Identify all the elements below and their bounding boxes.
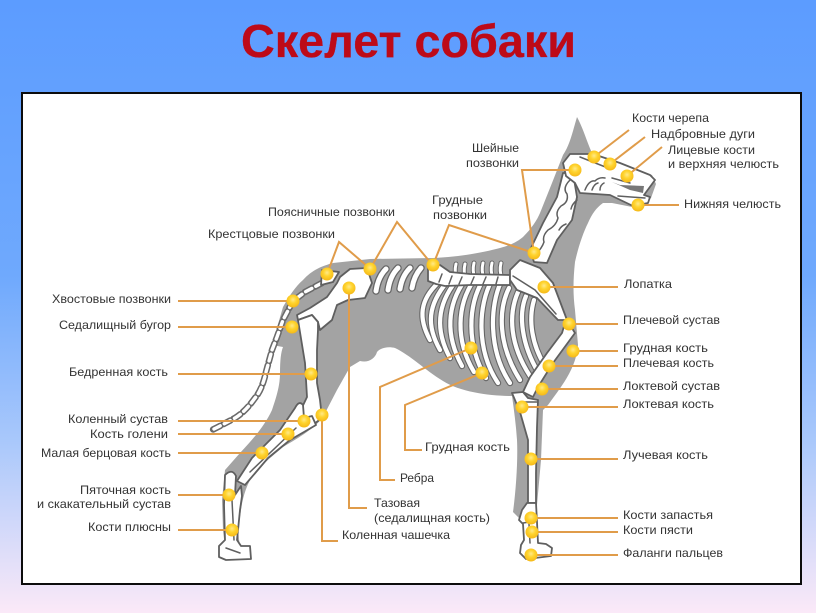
labels: bottom centre: Грудная кость bbox=[425, 440, 510, 454]
labels: left column: Коленный сустав bbox=[68, 412, 168, 426]
labels: right column: Кости запастья bbox=[623, 508, 713, 522]
femur bbox=[297, 315, 322, 427]
labels: head and spine: Шейные bbox=[472, 141, 519, 155]
labels: right column: Плечевой сустав bbox=[623, 313, 720, 327]
labels: right column: Лучевая кость bbox=[623, 448, 708, 462]
labels: head and spine: позвонки bbox=[433, 208, 487, 222]
spine: lumbar and thoracic vertebrae bbox=[376, 263, 510, 291]
labels: head and spine: Лицевые кости bbox=[668, 143, 755, 157]
marker dots bbox=[222, 150, 644, 562]
labels: left column: Бедренная кость bbox=[69, 365, 168, 379]
skull bbox=[563, 154, 655, 206]
labels: bottom centre bbox=[342, 440, 510, 542]
scapula bbox=[510, 260, 567, 320]
hind foot bbox=[219, 472, 251, 560]
labels: left column: Хвостовые позвонки bbox=[52, 292, 171, 306]
front foot bbox=[519, 503, 552, 559]
dog silhouette bbox=[222, 117, 656, 548]
labels: right column: Грудная кость bbox=[623, 341, 708, 355]
labels: bottom centre: Ребра bbox=[400, 471, 434, 485]
labels: head and spine: Кости черепа bbox=[632, 111, 709, 125]
labels: left column: Седалищный бугор bbox=[59, 318, 171, 332]
labels: head and spine: позвонки bbox=[466, 156, 519, 170]
radius and ulna bbox=[512, 392, 538, 503]
labels: left column: Малая берцовая кость bbox=[41, 446, 171, 460]
ribs bbox=[422, 280, 545, 383]
labels: bottom centre: (седалищная кость) bbox=[374, 511, 490, 525]
labels: head and spine bbox=[208, 111, 781, 241]
labels: left column: Кость голени bbox=[90, 427, 168, 441]
pelvis bbox=[297, 268, 372, 330]
labels: left column: и скакательный сустав bbox=[37, 497, 171, 511]
labels: left column: Пяточная кость bbox=[80, 483, 171, 497]
tibia and fibula bbox=[237, 403, 316, 485]
cervical vertebrae bbox=[530, 173, 577, 263]
title: Скелет собаки bbox=[241, 15, 576, 67]
labels: left column: Кости плюсны bbox=[88, 520, 171, 534]
labels: head and spine: Грудные bbox=[432, 193, 483, 207]
labels: right column: Плечевая кость bbox=[623, 356, 714, 370]
humerus bbox=[523, 323, 575, 397]
panel: diagram frame bbox=[22, 93, 801, 584]
labels: right column: Кости пясти bbox=[623, 523, 693, 537]
tail bones bbox=[212, 283, 322, 430]
labels: right column: Фаланги пальцев bbox=[623, 546, 723, 560]
labels: right column: Локтевая кость bbox=[623, 397, 714, 411]
labels: head and spine: Крестцовые позвонки bbox=[208, 227, 335, 241]
labels: right column: Локтевой сустав bbox=[623, 379, 720, 393]
labels: head and spine: Поясничные позвонки bbox=[268, 205, 395, 219]
labels: head and spine: Надбровные дуги bbox=[651, 127, 755, 141]
labels: right column: Лопатка bbox=[624, 277, 672, 291]
labels: left column bbox=[37, 292, 171, 534]
sacrum bbox=[321, 270, 339, 285]
labels: bottom centre: Коленная чашечка bbox=[342, 528, 450, 542]
labels: right column bbox=[623, 277, 723, 560]
labels: bottom centre: Тазовая bbox=[374, 496, 420, 510]
labels: head and spine: и верхняя челюсть bbox=[668, 157, 779, 171]
labels: head and spine: Нижняя челюсть bbox=[684, 197, 781, 211]
callout lines bbox=[178, 130, 679, 555]
